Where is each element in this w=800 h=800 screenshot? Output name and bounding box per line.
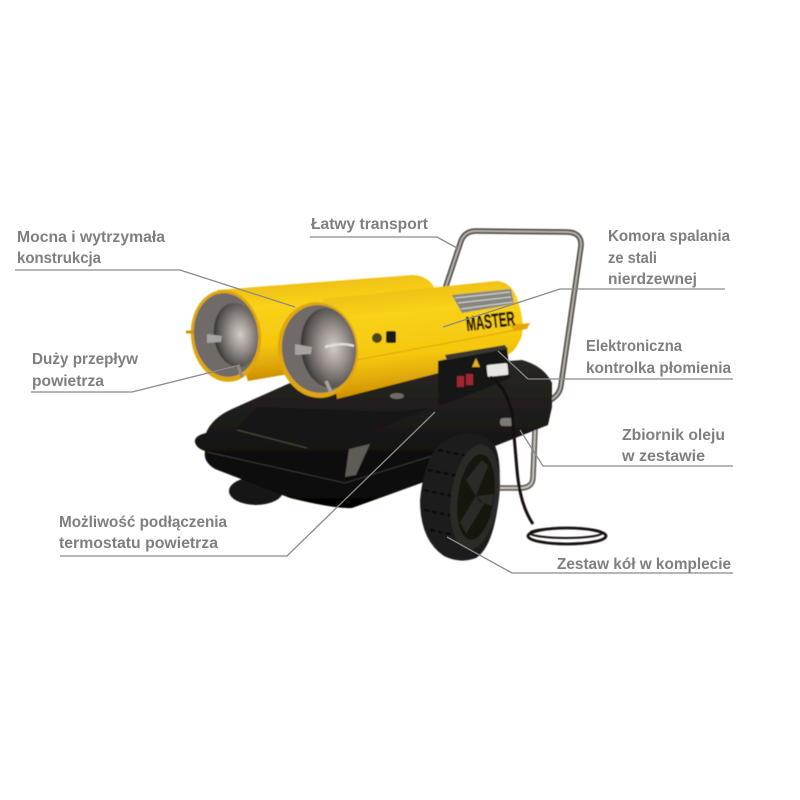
tank cap [390, 393, 404, 399]
callout: Możliwość podłączenia termostatu powietrza: Możliwość podłączenia [59, 514, 227, 531]
callout: Łatwy transport [310, 216, 457, 248]
plug [486, 363, 509, 377]
heater illustration [186, 231, 606, 561]
logo: MASTER: MASTER [465, 308, 517, 336]
callout: Duży przepływ powietrza [31, 351, 240, 392]
callout: Duży przepływ powietrza: Duży przepływ [32, 351, 139, 368]
callout: Komora spalania ze stali nierdzewnej [443, 228, 730, 327]
callout: Komora spalania ze stali nierdzewnej: ze stali [608, 250, 657, 267]
fan switch icon [372, 333, 382, 343]
callout: Zestaw kół w komplecie: Zestaw kół w komplecie [557, 556, 731, 573]
rear flange [510, 323, 530, 331]
callout: Elektroniczna kontrolka płomienia: Elektroniczna [586, 338, 682, 355]
callout: Łatwy transport: Łatwy transport [311, 216, 429, 233]
power switch [386, 331, 396, 343]
tank lid recess [236, 407, 430, 447]
callout: Mocna i wytrzymała konstrukcja [15, 229, 295, 307]
callout: Możliwość podłączenia termostatu powietrza: termostatu powietrza [59, 535, 218, 552]
wheel spokes [460, 460, 494, 534]
callout: Elektroniczna kontrolka płomienia [498, 338, 733, 379]
callout: Możliwość podłączenia termostatu powietrza [59, 412, 435, 556]
warning triangle [472, 358, 480, 367]
tank highlight [345, 444, 370, 477]
body seam [352, 327, 522, 360]
fuel connector [500, 418, 514, 426]
control panel [438, 345, 510, 405]
callout: Mocna i wytrzymała konstrukcja: Mocna i wytrzymała [17, 229, 165, 246]
callout: Zbiornik oleju w zestawie: Zbiornik oleju [622, 427, 725, 444]
callout: Mocna i wytrzymała konstrukcja: konstrukcja [17, 250, 101, 267]
red switches [457, 376, 464, 387]
callout: Zbiornik oleju w zestawie [520, 427, 733, 466]
callout: Elektroniczna kontrolka płomienia: kontrolka płomienia [586, 360, 731, 377]
callout: Zestaw kół w komplecie [447, 537, 733, 573]
fuel tank [195, 360, 552, 508]
rear support frame [486, 425, 535, 488]
callout: Zbiornik oleju w zestawie: w zestawie [621, 448, 705, 465]
power cable [490, 377, 606, 544]
rear caster [229, 477, 283, 505]
handle frame [446, 231, 581, 441]
callout: Duży przepływ powietrza: powietrza [32, 373, 104, 390]
callout: Komora spalania ze stali nierdzewnej: Komora spalania [608, 228, 730, 245]
callout: Komora spalania ze stali nierdzewnej: nierdzewnej [608, 271, 697, 288]
warning labels [452, 289, 514, 313]
rear cylinder [186, 275, 434, 386]
front wheel [420, 434, 506, 561]
front cylinder [272, 281, 530, 403]
tank seam [207, 452, 432, 483]
